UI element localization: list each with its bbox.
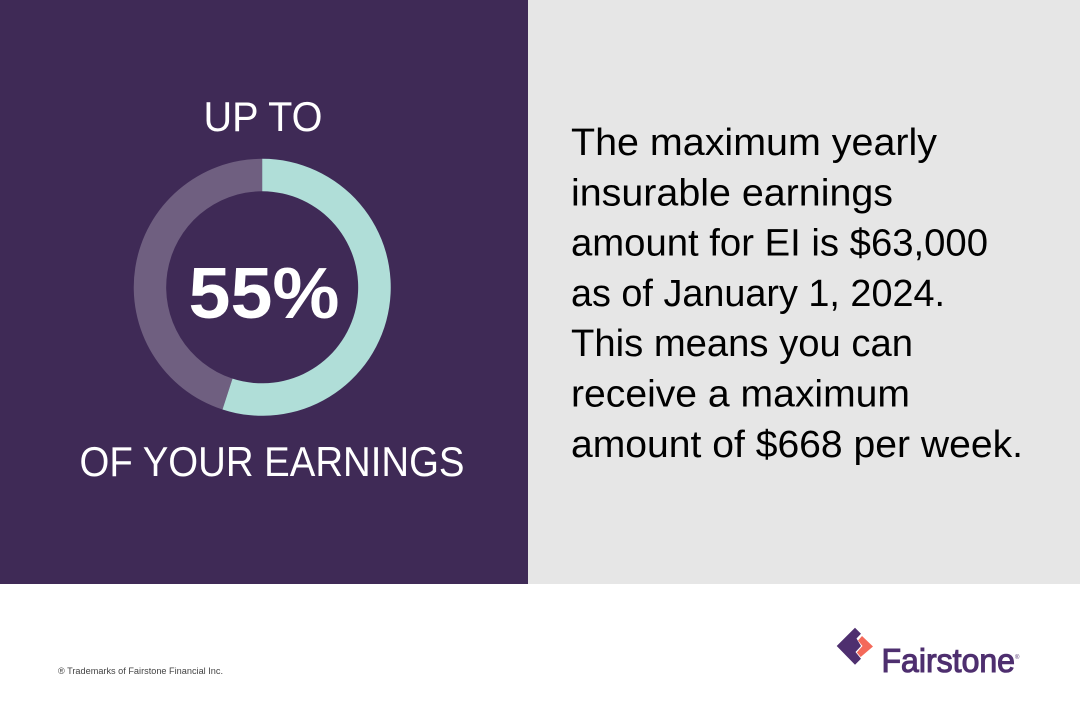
registered mark: ® [1015, 654, 1020, 661]
body text: amount of $668 per week. [571, 424, 1023, 466]
body text: This means you can [571, 323, 913, 365]
body text: receive a maximum [571, 374, 910, 416]
wordmark: Fairstone [882, 642, 1015, 679]
donut chart: 55% [134, 159, 391, 416]
body text: The maximum yearly [571, 122, 937, 164]
body text: as of January 1, 2024. [571, 273, 945, 315]
panel: purple left [0, 0, 528, 584]
caption: of your earnings: OF YOUR EARNINGS [80, 438, 464, 485]
panel: grey right [528, 0, 1080, 584]
icon: diamond mark [837, 628, 873, 665]
logo: Fairstone [837, 628, 1020, 679]
heading: up to: UP TO [204, 93, 322, 140]
donut value: 55% [188, 254, 340, 334]
body text: insurable earnings [571, 172, 893, 214]
body text [571, 122, 1023, 466]
body text: amount for EI is $63,000 [571, 222, 988, 264]
footnote: trademarks: ® Trademarks of Fairstone Financial Inc. [58, 666, 223, 676]
